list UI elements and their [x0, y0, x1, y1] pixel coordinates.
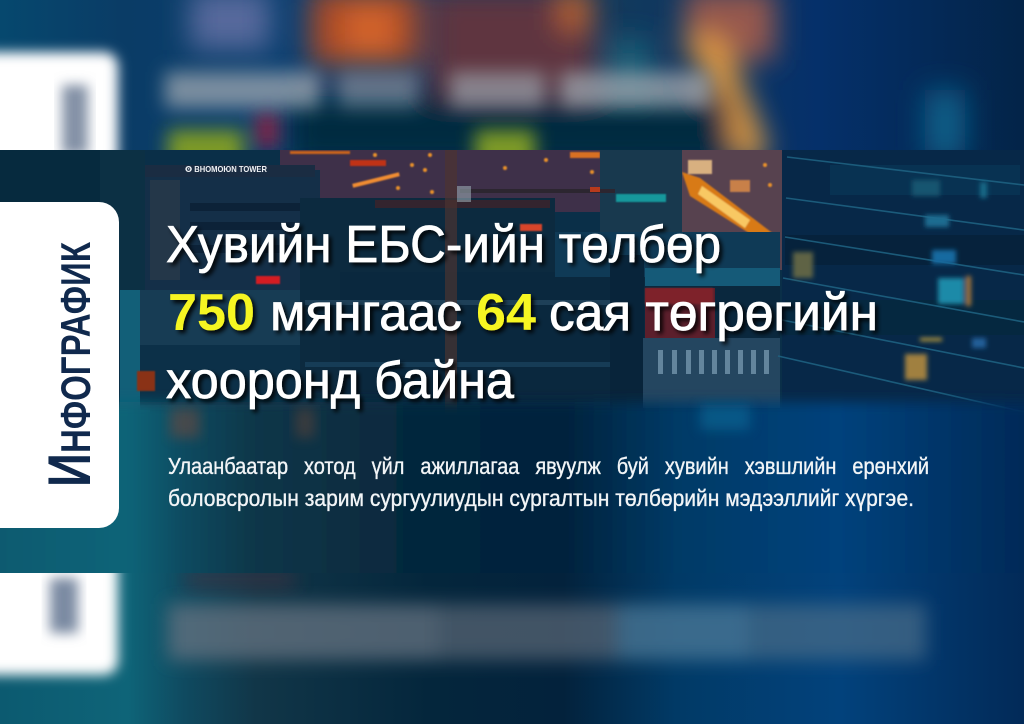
blurred label text echo, bottom: [50, 578, 78, 633]
label card: Инфографик: [0, 202, 119, 528]
sky with city lights: [280, 150, 787, 270]
panel: main banner photo: [0, 150, 1024, 602]
description paragraph: [168, 453, 929, 511]
title line 2 with highlighted numbers: 750: [168, 283, 255, 341]
crane: [445, 150, 615, 430]
lower gradient floor: [0, 396, 1024, 573]
blurred label text echo, top: [62, 85, 88, 155]
blurred heading echo, top: [165, 72, 710, 108]
road and lights: [289, 150, 773, 232]
panel: blurred top strip: [0, 0, 981, 150]
blurred brown hint: [185, 570, 295, 588]
lower left block: [140, 290, 300, 406]
title line 1: Хувийн ЕБС-ийн төлбөр: [166, 215, 721, 273]
vertical label text: ИНФОГРАФИК: [36, 242, 103, 487]
title line 2 with highlighted numbers: мянгаас: [270, 283, 462, 341]
title line 2 with highlighted numbers: [168, 283, 878, 341]
title line 3: хооронд байна: [166, 351, 514, 409]
tower sign: ⵙ ВНОМОЮN TOWER: [185, 164, 267, 174]
title: [166, 215, 878, 409]
title line 2 with highlighted numbers: сая төгрөгийн: [549, 283, 878, 341]
grey windowed block: [643, 338, 780, 408]
central construction building: [300, 198, 555, 398]
teal and red panels: [645, 268, 780, 340]
panel: blurred bottom strip: [0, 573, 1024, 724]
right glass tower: [778, 150, 1024, 420]
title line 2 with highlighted numbers: 64: [476, 283, 536, 341]
blurred white label echo, top: [0, 42, 128, 150]
description paragraph: Улаанбаатар хотод үйл ажиллагаа явуулж буй хувийн хэвшлийн ерөнхий: [168, 453, 929, 479]
blurred paragraph echo: [168, 604, 926, 660]
left building: [145, 170, 320, 295]
description paragraph: боловсролын зарим сургуулиудын сургалтын төлбөрийн мэдээллийг хүргэе.: [168, 485, 914, 511]
tall center-right tower: [600, 150, 682, 235]
blurred white label echo, bottom: [0, 540, 118, 675]
